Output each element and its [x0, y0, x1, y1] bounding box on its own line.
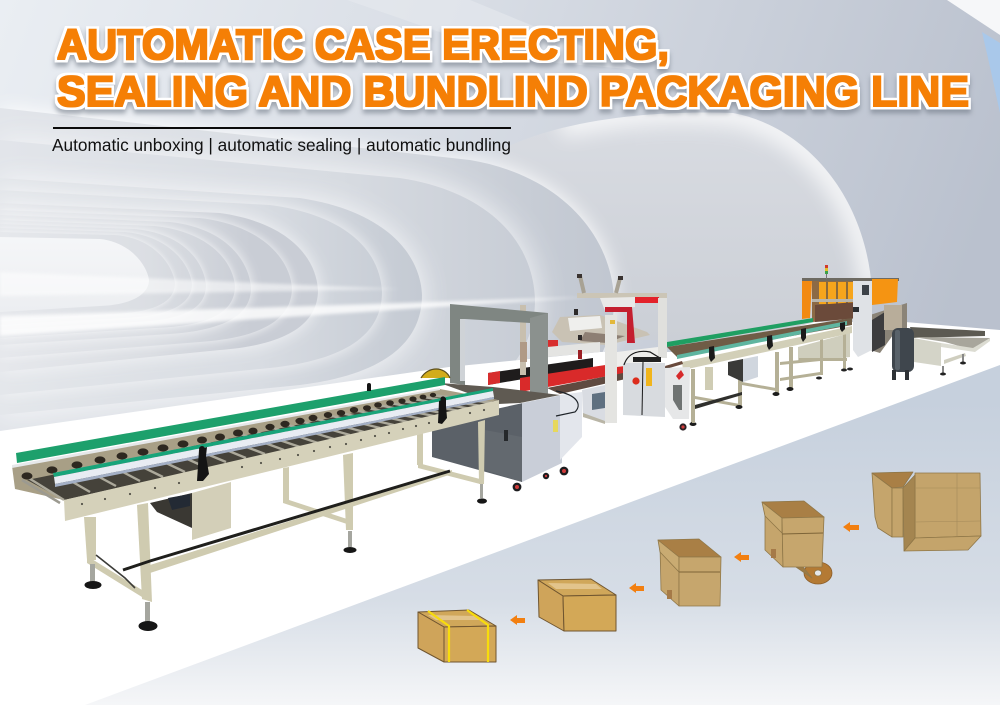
divider line [53, 127, 511, 129]
upper top beam and plate [577, 293, 667, 298]
lower body [582, 385, 605, 423]
side chute [665, 367, 695, 431]
box 4: sealed carton [538, 579, 616, 631]
green guide plate [16, 377, 445, 463]
sealer head [552, 315, 650, 345]
roller ends [22, 393, 436, 480]
aluminium side rail [53, 388, 494, 487]
electric box [728, 356, 758, 382]
flow diagram: cardboard box stages [418, 472, 981, 662]
motor box [150, 482, 231, 540]
white columns [605, 315, 617, 423]
white floor band [0, 322, 1000, 705]
roller bed [27, 397, 493, 500]
sealer belts [488, 358, 593, 385]
arrow [734, 552, 749, 562]
subtitle: Automatic unboxing | automatic sealing | automatic bundling [52, 135, 511, 155]
strap reel [421, 369, 450, 378]
black strap cable [123, 471, 450, 570]
strapping machine [421, 304, 582, 491]
arrow [843, 522, 859, 532]
clamp handles [197, 383, 447, 481]
infeed conveyor to erector [665, 318, 852, 426]
far legs and bracing [84, 420, 485, 602]
main roller conveyor [12, 377, 499, 631]
box 1: flat carton being erected [872, 472, 981, 551]
rollers [27, 395, 493, 500]
erector frame [798, 265, 907, 380]
case sealing machine [488, 274, 695, 431]
arrow [510, 615, 525, 625]
electrical box [623, 351, 665, 417]
blue-gray floor wedge [85, 365, 1000, 705]
box 3: open carton [658, 539, 721, 606]
front beam [64, 400, 499, 521]
box 5: sealed and strapped carton [418, 610, 496, 662]
case erector machine [798, 265, 990, 380]
gray arch frame [450, 304, 548, 397]
back wall [12, 389, 498, 500]
air tank [892, 328, 914, 380]
title: AUTOMATIC CASE ERECTING, [57, 22, 669, 69]
feet [84, 484, 487, 631]
title [57, 22, 969, 116]
output conveyor [910, 327, 990, 376]
arrow [629, 583, 644, 593]
box 2: open carton with tape [762, 501, 832, 584]
title: SEALING AND BUNDLIND PACKAGING LINE [57, 69, 969, 116]
cabinet [432, 383, 582, 491]
